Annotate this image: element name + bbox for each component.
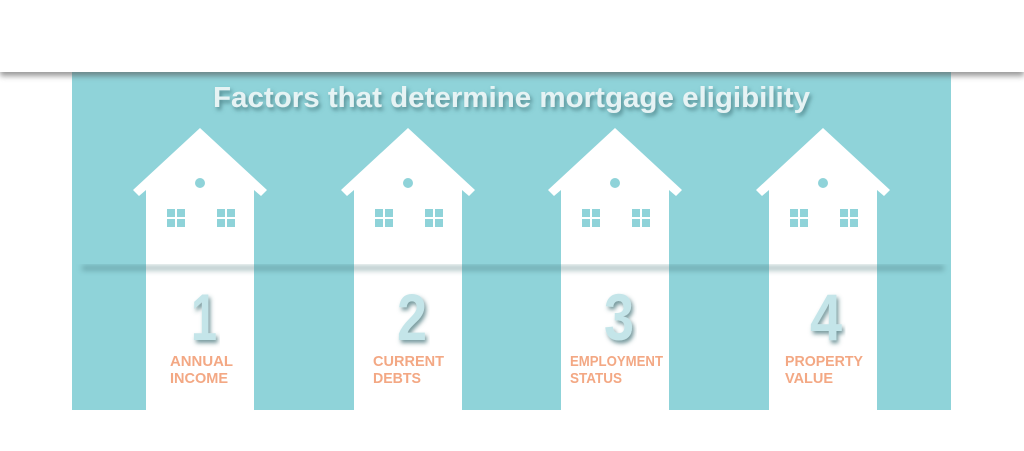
title: Factors that determine mortgage eligibility	[213, 82, 810, 114]
house 4	[756, 128, 890, 410]
house 2: 2	[397, 280, 427, 354]
house 3: STATUS	[570, 370, 622, 387]
house 1: INCOME	[170, 370, 228, 387]
house 4: VALUE	[785, 370, 833, 387]
house 2: DEBTS	[373, 370, 421, 387]
house 1: 1	[191, 280, 217, 354]
house 2	[341, 128, 475, 410]
teal panel	[72, 60, 951, 410]
house 4: 4	[810, 280, 842, 354]
ledge shadow	[82, 266, 944, 270]
house 3: EMPLOYMENT	[570, 353, 663, 370]
top white bar with shadow	[0, 0, 1024, 76]
house 1: ANNUAL	[170, 353, 233, 370]
house 4: PROPERTY	[785, 353, 863, 370]
house 3: 3	[604, 280, 634, 354]
house 3	[548, 128, 682, 410]
house 1	[133, 128, 267, 410]
house 2: CURRENT	[373, 353, 444, 370]
